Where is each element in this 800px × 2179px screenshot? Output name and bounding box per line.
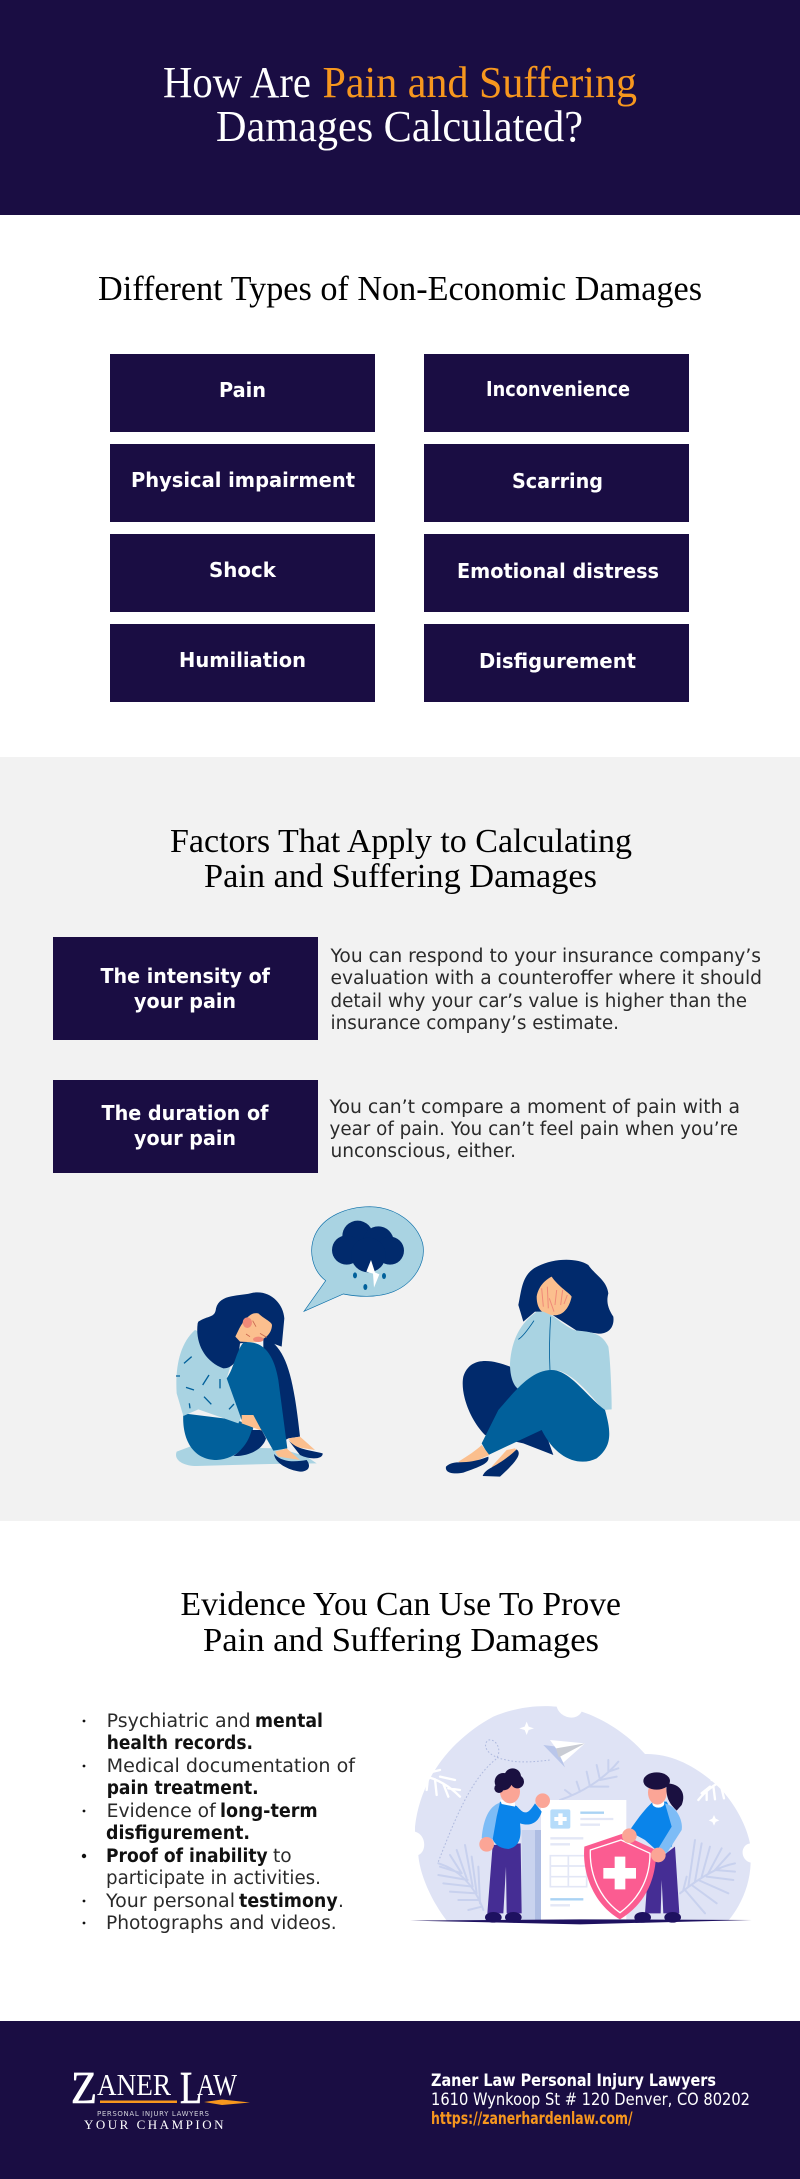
box: pain <box>110 354 375 432</box>
icon: stars <box>519 1722 719 1826</box>
evidence bullet list: disfigurement. <box>106 1823 250 1844</box>
logo: Zaner Law: YOUR CHAMPION <box>84 2117 224 2132</box>
text: intensity description: insurance company’s estimate. <box>330 1013 619 1034</box>
text: intensity description <box>329 946 762 1034</box>
heading: evidence <box>180 1586 621 1659</box>
logo: Zaner Law <box>71 2062 250 2132</box>
evidence bullet list: Proof of inability <box>106 1846 268 1867</box>
panel: factors <box>0 757 800 1521</box>
logo: Zaner Law: Z <box>71 2062 97 2113</box>
contact details <box>431 2071 750 2129</box>
contact details: Zaner Law Personal Injury Lawyers <box>431 2071 716 2091</box>
evidence bullet list: . <box>338 1891 344 1912</box>
text: duration description: You can’t compare a moment of pain with a <box>328 1097 740 1118</box>
icon: woman covering face <box>446 1260 614 1477</box>
box: humiliation: Humiliation <box>179 648 306 672</box>
box: disfigurement <box>424 624 689 702</box>
contact details: 1610 Wynkoop St # 120 Denver, CO 80202 <box>431 2090 750 2110</box>
box: shock <box>110 534 375 612</box>
panel: types of non-economic damages <box>98 269 702 702</box>
heading: factors: Pain and Suffering Damages <box>204 858 597 895</box>
icon: woman <box>630 1772 683 1923</box>
icon: woman hugging knees <box>176 1292 323 1472</box>
background blob <box>415 1706 751 1921</box>
evidence bullet list: long-term <box>220 1801 318 1822</box>
heading: different types: Different Types of Non-Economic Damages <box>98 269 702 308</box>
box: pain: Pain <box>219 378 266 402</box>
heading: factors <box>170 823 632 895</box>
evidence bullet list: pain treatment. <box>107 1778 259 1799</box>
box: physical impairment <box>110 444 375 522</box>
box: intensity of pain: your pain <box>134 989 236 1013</box>
icon: paper plane with dotted trail <box>438 1740 585 1862</box>
box: emotional distress: Emotional distress <box>457 559 659 583</box>
box: emotional distress <box>424 534 689 612</box>
heading: evidence: Pain and Suffering Damages <box>203 1622 599 1659</box>
box: shock: Shock <box>209 558 277 582</box>
header band <box>0 0 800 215</box>
icon: white leaves <box>425 1770 725 1800</box>
text: duration description: unconscious, either. <box>330 1141 516 1162</box>
illustration: two sad women <box>176 1207 614 1477</box>
evidence bullet list: health records. <box>107 1733 253 1754</box>
text: intensity description: detail why your car’s value is higher than the <box>330 991 747 1012</box>
text: intensity description: evaluation with a counteroffer where it should <box>330 968 762 989</box>
box: duration of pain: The duration of <box>102 1101 269 1125</box>
footer band <box>0 2021 800 2179</box>
title: Damages Calculated? <box>216 102 583 151</box>
logo: Zaner Law: ANER <box>97 2067 171 2102</box>
heading: evidence: Evidence You Can Use To Prove <box>180 1586 621 1623</box>
box: inconvenience <box>424 354 689 432</box>
icon: man <box>479 1768 550 1923</box>
box: duration of pain <box>53 1080 318 1173</box>
text: duration description: year of pain. You can’t feel pain when you’re <box>330 1119 738 1140</box>
illustration: medical insurance <box>410 1706 752 1924</box>
logo: Zaner Law: AW <box>197 2067 238 2102</box>
title <box>163 58 637 151</box>
icon: medical document <box>522 1800 626 1920</box>
icon: shield with cross <box>584 1828 666 1919</box>
evidence bullet list: Medical documentation of <box>107 1756 355 1777</box>
title: How Are <box>163 58 311 107</box>
evidence bullet list: Your personal <box>105 1891 235 1912</box>
evidence bullet list: to <box>273 1846 292 1867</box>
icon: speech bubble with storm cloud <box>304 1207 423 1311</box>
evidence bullet list: mental <box>255 1711 323 1732</box>
box: scarring: Scarring <box>512 469 603 493</box>
box: duration of pain: your pain <box>134 1126 236 1150</box>
logo: Zaner Law: PERSONAL INJURY LAWYERS <box>97 2110 210 2118</box>
box: physical impairment: Physical impairment <box>131 468 355 492</box>
ground line <box>410 1919 752 1924</box>
title: Pain and Suffering <box>322 58 637 107</box>
icon: palm leaves <box>438 1760 735 1913</box>
box: humiliation <box>110 624 375 702</box>
evidence bullet list: testimony <box>239 1891 338 1912</box>
evidence bullet list: Evidence of <box>107 1801 216 1822</box>
text: duration description <box>328 1097 740 1162</box>
box: intensity of pain <box>53 937 318 1040</box>
logo: Zaner Law: L <box>180 2062 202 2113</box>
evidence bullet list <box>82 1711 355 1934</box>
box: scarring <box>424 444 689 522</box>
evidence bullet list: Psychiatric and <box>107 1711 251 1732</box>
box: inconvenience: Inconvenience <box>486 377 630 401</box>
contact details: https://zanerhardenlaw.com/ <box>431 2109 633 2129</box>
evidence bullet list: participate in activities. <box>106 1868 321 1889</box>
box: intensity of pain: The intensity of <box>100 964 270 988</box>
heading: factors: Factors That Apply to Calculating <box>170 823 632 860</box>
evidence bullet list: Photographs and videos. <box>106 1913 337 1934</box>
text: intensity description: You can respond to your insurance company’s <box>329 946 761 967</box>
box: disfigurement: Disfigurement <box>479 649 636 673</box>
